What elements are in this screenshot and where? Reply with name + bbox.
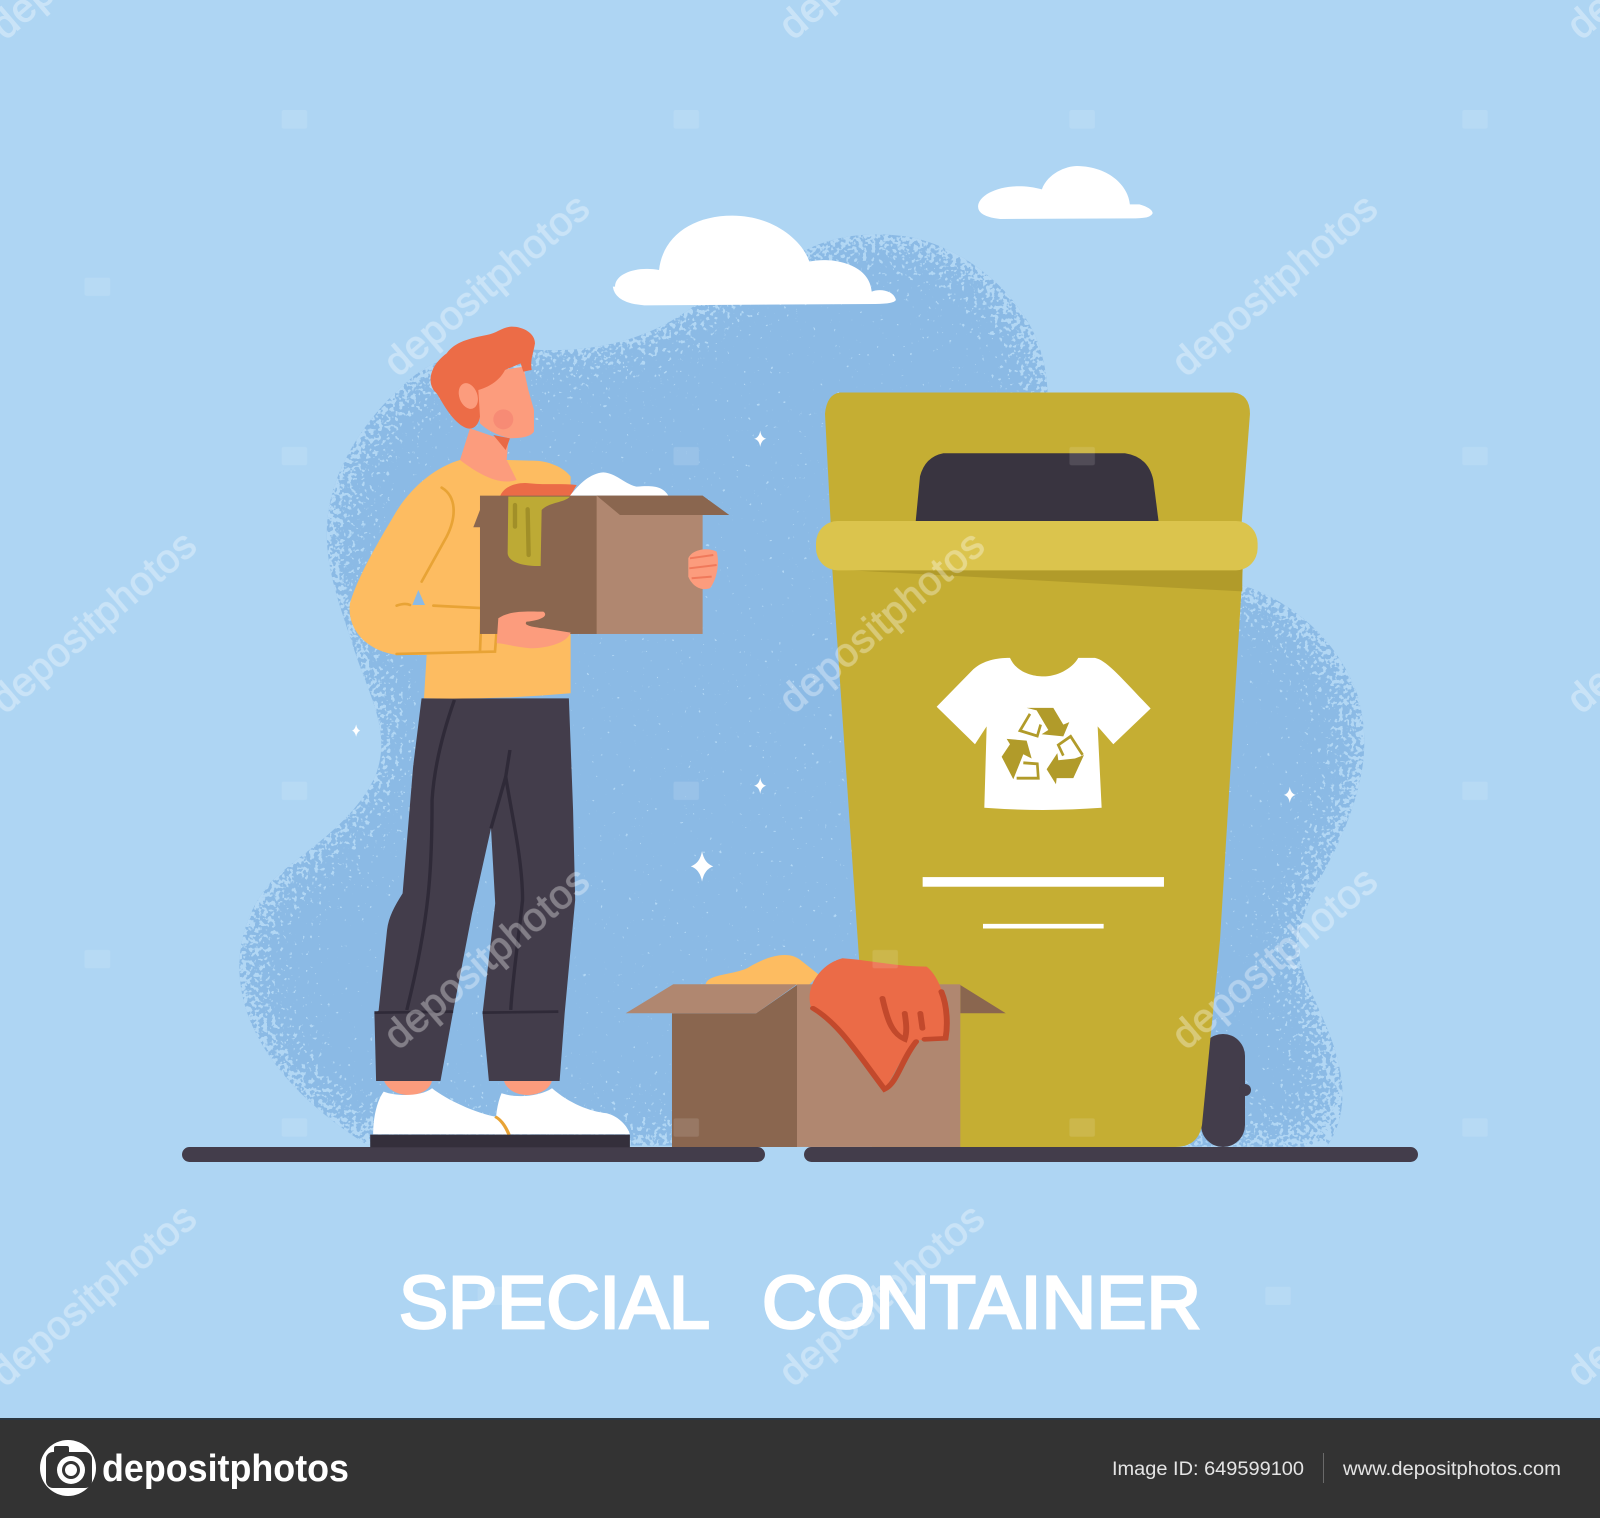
watermark text: depositphotos: [1163, 185, 1386, 385]
upper hand: [688, 549, 718, 589]
red cloth: [810, 958, 949, 1090]
recycling bin: [816, 392, 1258, 1147]
ground line right: [804, 1147, 1418, 1162]
olive cloth stripes: [515, 505, 529, 555]
yellow cloth: [706, 955, 819, 985]
footer divider: [1323, 1453, 1324, 1483]
open box on the ground: [626, 955, 1006, 1147]
watermark text: depositphotos: [770, 1195, 993, 1395]
rim shadow: [831, 569, 1242, 591]
olive cloth over box edge: [508, 497, 570, 566]
finger lines: [689, 555, 717, 578]
sleeve seam lines: [397, 488, 498, 654]
ear: [455, 380, 481, 412]
bin body: [832, 565, 1243, 1147]
man legs: [370, 698, 630, 1147]
box right flap: [960, 985, 1006, 1013]
box left flap: [626, 984, 797, 1013]
left shoe: [373, 1088, 508, 1134]
image id: Image ID: 649599100: [1112, 1459, 1304, 1480]
ground line left: [182, 1147, 765, 1162]
box left face: [672, 985, 797, 1147]
man upper body: [350, 327, 729, 699]
watermark text: depositphotos: [375, 858, 598, 1058]
red cloth in box: [500, 483, 577, 497]
bin lid: [816, 392, 1258, 929]
trousers: [374, 698, 575, 1081]
neck shadow: [493, 435, 510, 450]
watermark text: depositphotos: [770, 522, 993, 722]
watermark text: depositphotos: [1163, 858, 1386, 1058]
title: SPECIAL: [399, 1261, 710, 1344]
cheek: [493, 409, 513, 429]
carried box: [473, 496, 729, 634]
bin rim: [816, 521, 1258, 570]
sweater: [350, 460, 571, 699]
website url: www.depositphotos.com: [1342, 1459, 1561, 1480]
label line short: [983, 924, 1104, 929]
ankles: [384, 1080, 552, 1095]
elbow gap: [412, 590, 425, 605]
sparkles: [352, 431, 1296, 882]
trouser creases: [374, 700, 558, 1013]
shoe lace: [495, 1117, 509, 1135]
small cloud: [978, 166, 1153, 219]
footer logo icon: [40, 1440, 96, 1496]
recycle symbol: [1002, 708, 1084, 784]
label line long: [923, 877, 1164, 887]
neck: [460, 428, 517, 482]
white cloth in box: [570, 472, 668, 496]
watermark text: depositphotos: [375, 185, 598, 385]
large cloud: [613, 216, 896, 305]
right shoe: [495, 1088, 630, 1134]
watermark camera marks: [85, 110, 1488, 1305]
bin slot: [916, 453, 1159, 522]
shoe sole: [370, 1135, 630, 1147]
title: CONTAINER: [762, 1261, 1201, 1344]
clouds: [613, 166, 1153, 305]
footer bar: [0, 1418, 1600, 1518]
face: [477, 367, 534, 438]
bin wheel: [1201, 1034, 1251, 1147]
man carrying a box: [350, 327, 729, 1147]
lower hand: [497, 612, 571, 648]
hair: [431, 327, 535, 429]
t-shirt icon: [937, 658, 1151, 810]
textured background blob: [239, 234, 1364, 1147]
red cloth folds: [813, 992, 947, 1089]
title: [399, 1261, 1201, 1344]
box right face: [797, 984, 960, 1147]
footer logo wordmark: depositphotos: [102, 1448, 349, 1490]
